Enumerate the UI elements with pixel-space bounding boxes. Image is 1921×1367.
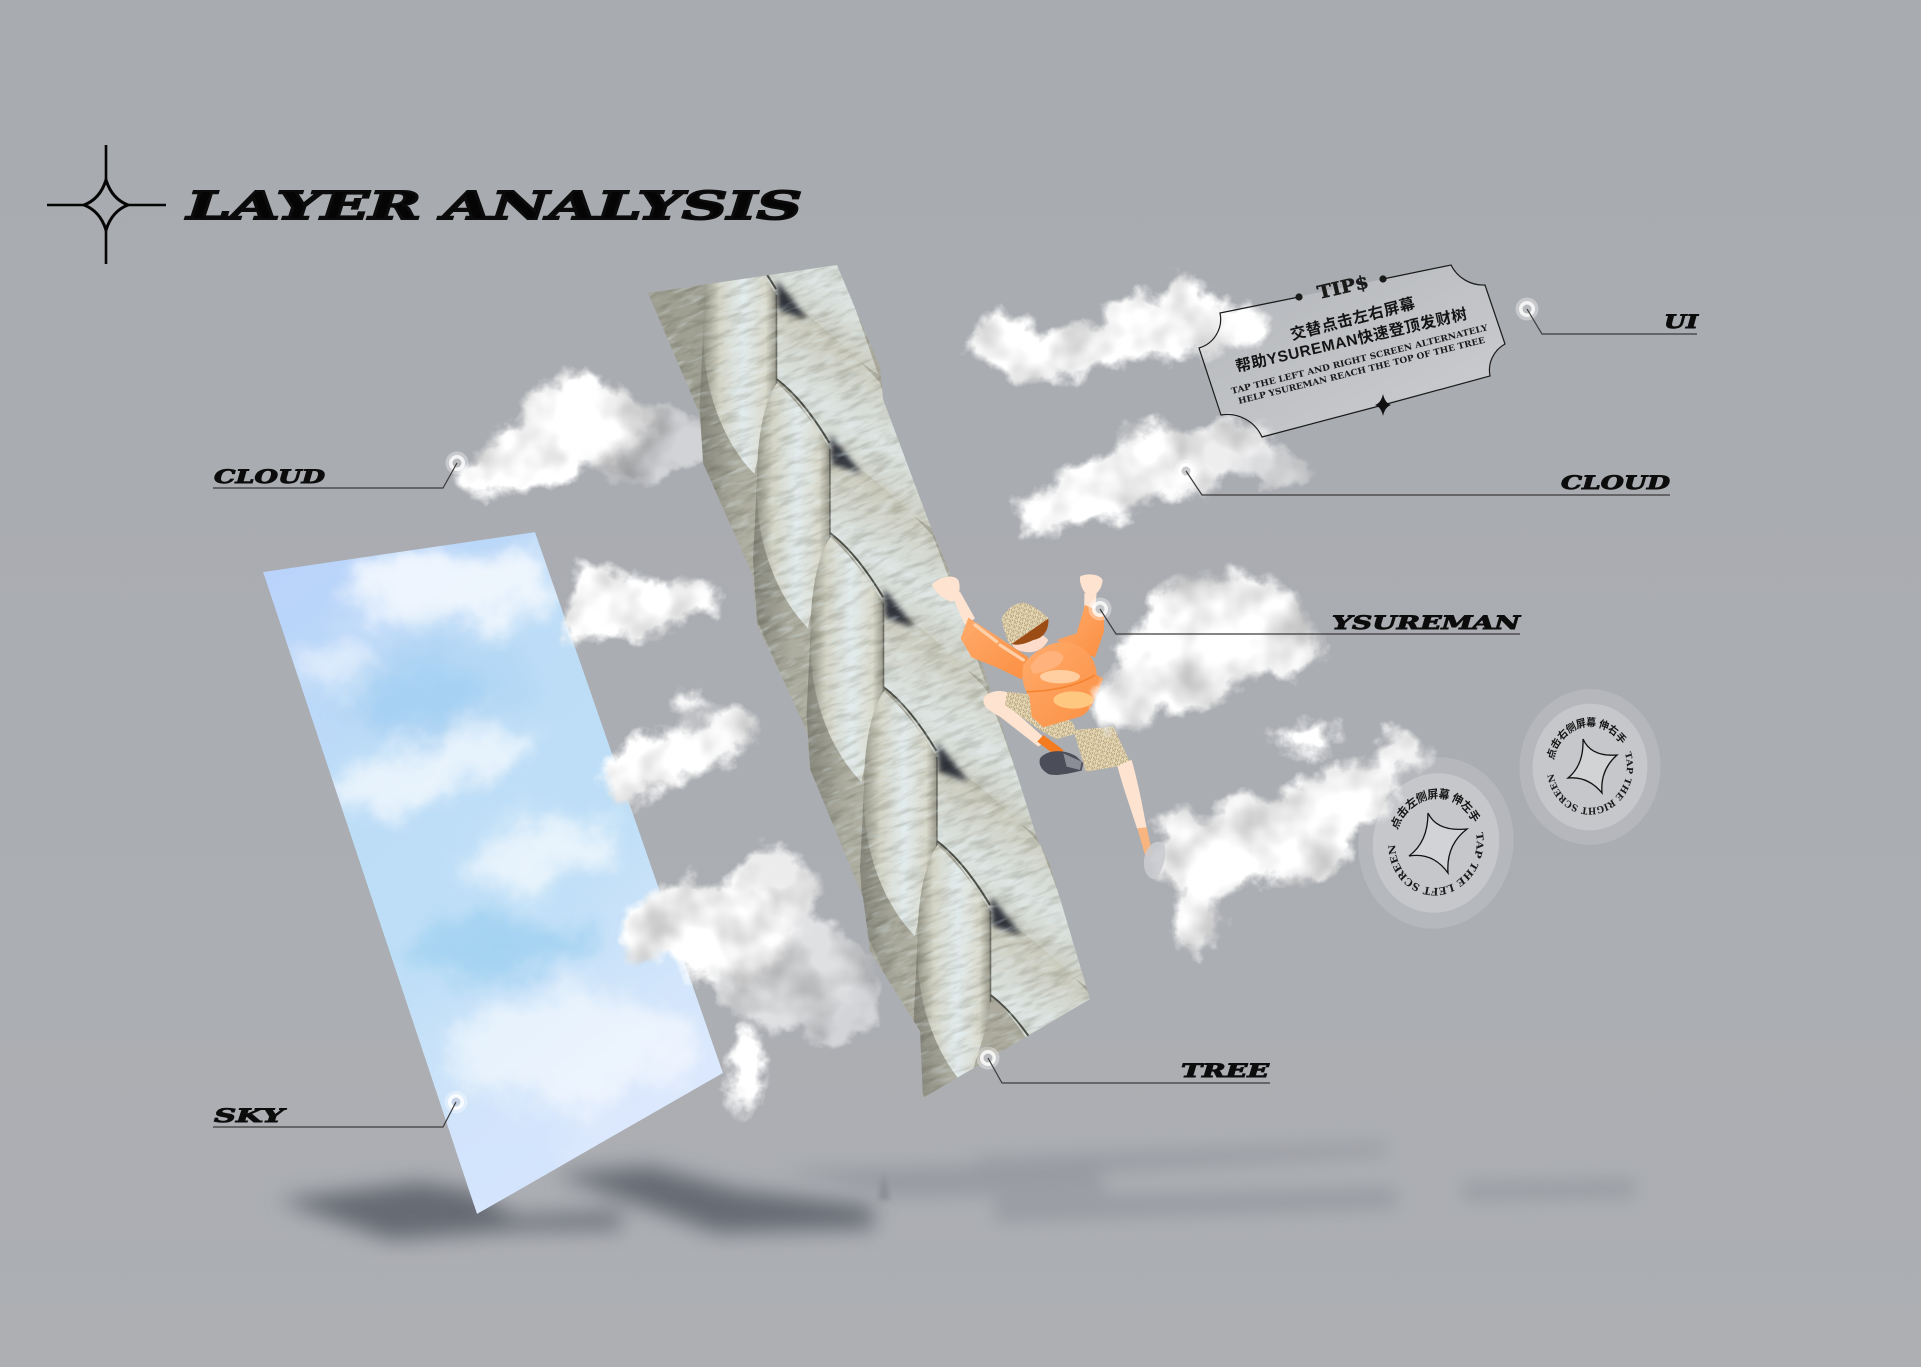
- panel: sky layer: [263, 532, 723, 1214]
- left arm: [932, 576, 1028, 679]
- clouds: left side behind the rope: [458, 375, 877, 1120]
- shorts: [1005, 692, 1129, 772]
- label: ui: [1516, 298, 1699, 334]
- cloud: behind figure: [1142, 576, 1323, 676]
- label: ui: UI: [1664, 311, 1699, 333]
- cloud: middle right: [1019, 424, 1308, 532]
- label: cloud left: CLOUD: [214, 466, 326, 488]
- icon: right tap badge: 点击右侧屏幕 伸右手: [1546, 717, 1626, 760]
- icon: ticket bottom star: [1375, 394, 1391, 416]
- head and bucket hat: [1002, 603, 1049, 652]
- cloud: big lower: [619, 848, 877, 1120]
- label: ysureman: [1088, 598, 1521, 634]
- label: cloud right: CLOUD: [1561, 472, 1671, 494]
- cloud: covering figure's waist: [1093, 624, 1237, 730]
- icon: left tap badge: [1358, 758, 1514, 928]
- icon: right tap badge: TAP THE RIGHT SCREEN: [1547, 751, 1634, 815]
- icon: left badge star: [1409, 813, 1467, 873]
- cloud: lower right: [1158, 734, 1424, 953]
- label: tree: [976, 1046, 1270, 1083]
- panel: tree (giant rope trunk): [648, 265, 1090, 1098]
- cloud: lower mid left: [605, 692, 757, 805]
- icon: left tap badge: TAP THE LEFT SCREEN: [1388, 832, 1484, 896]
- text: English instruction: TAP THE LEFT AND RIGHT SCREEN ALTERNATELY: [1230, 323, 1490, 397]
- right arm: [1057, 574, 1104, 657]
- text: Chinese instruction: 交替点击左右屏幕: [1288, 293, 1417, 344]
- label: cloud left: [213, 452, 468, 488]
- icon: right badge star: [1568, 739, 1617, 793]
- cloud: upper left: [458, 375, 702, 492]
- cloud: small wisp: [1275, 725, 1334, 757]
- figure: Ysureman climber: [932, 574, 1165, 879]
- heading: tips: TIP$: [1315, 272, 1371, 304]
- label: tree: TREE: [1181, 1060, 1270, 1082]
- text: English instruction: HELP YSUREMAN REACH THE TOP OF THE TREE: [1237, 336, 1487, 407]
- cloud: mid left: [561, 565, 718, 641]
- cloud: top right: [970, 277, 1264, 381]
- title: LAYER ANALYSIS: [185, 183, 802, 228]
- icon: title sparkle: [47, 145, 166, 264]
- ground shadows: [277, 1143, 1635, 1240]
- right leg and shoe: [1117, 760, 1165, 879]
- panel: tips ticket (UI): [1199, 265, 1505, 437]
- left leg and shoe: [983, 691, 1083, 775]
- label: cloud right: [1174, 460, 1671, 495]
- icon: left tap badge: 点击左侧屏幕 伸左手: [1391, 788, 1480, 830]
- clouds: right side: [970, 277, 1424, 953]
- label: sky: [213, 1090, 468, 1127]
- puffer jacket: [1022, 642, 1103, 727]
- label: sky: SKY: [214, 1105, 288, 1127]
- icon: right tap badge: [1520, 690, 1660, 844]
- label: ysureman: YSUREMAN: [1332, 612, 1521, 634]
- text: Chinese instruction: 帮助YSUREMAN快速登顶发财树: [1234, 304, 1469, 376]
